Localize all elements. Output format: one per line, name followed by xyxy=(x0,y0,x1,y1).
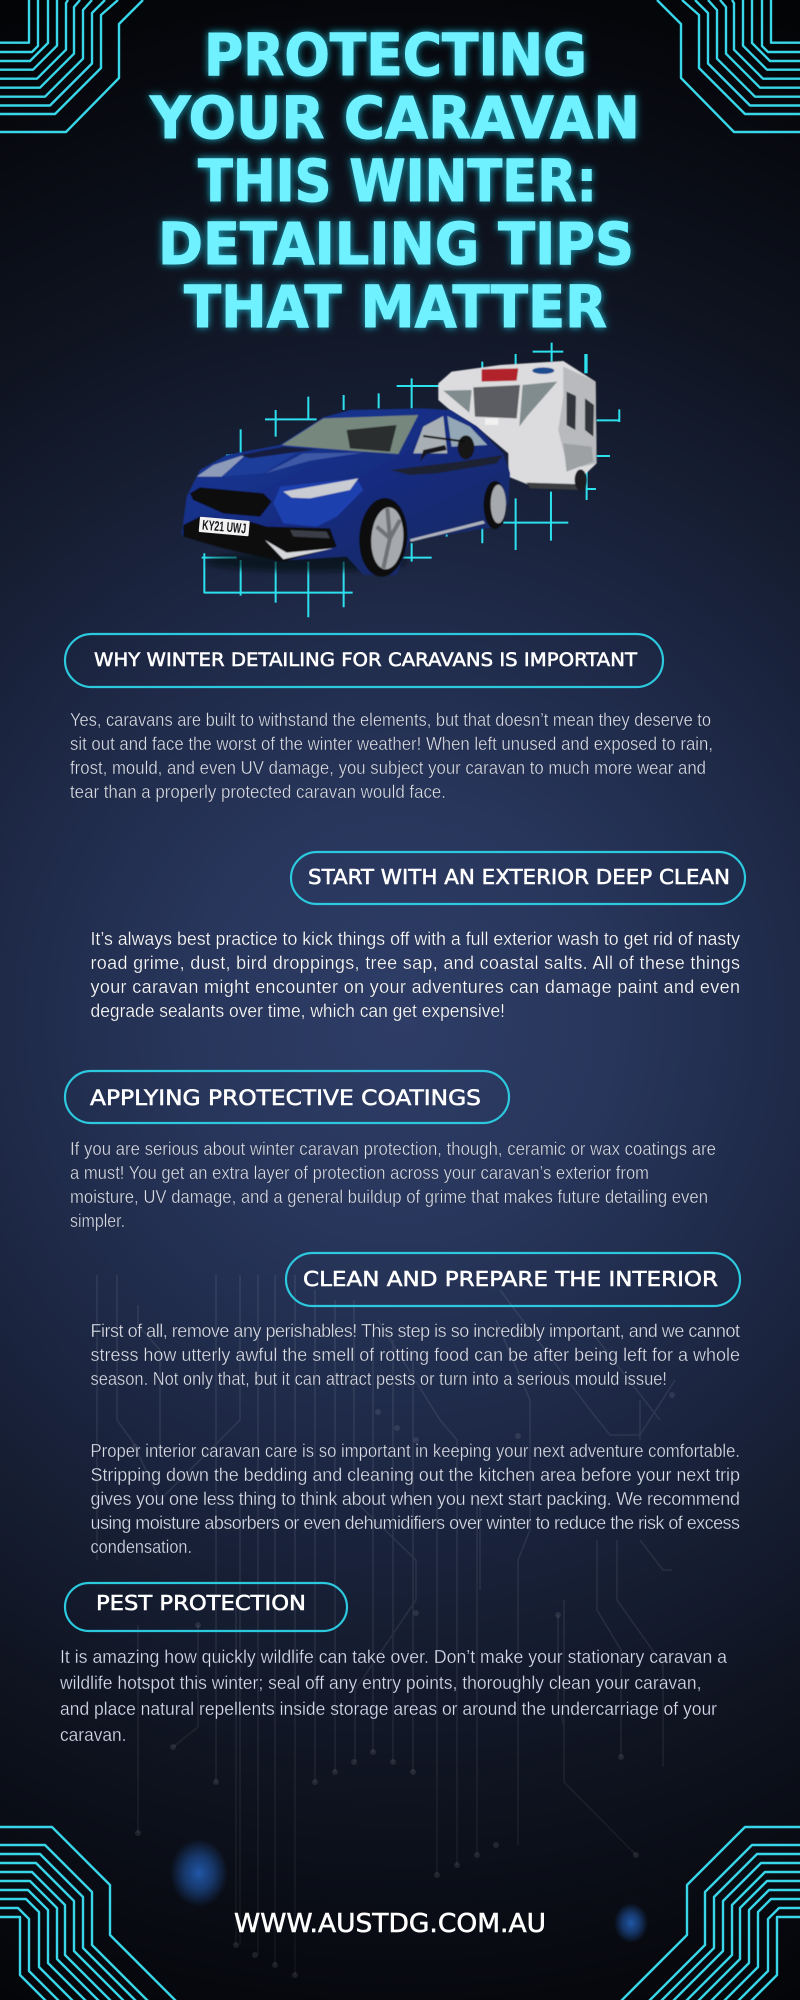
body text: perishables: stress how utterly awful the smell of rotting food can be after being left for a whole xyxy=(90,1345,740,1365)
body text: sit out and face the worst of the winter weather! When left unused and exposed to rain, xyxy=(70,734,713,754)
section 1: why winter detailing xyxy=(65,634,713,802)
title: THIS WINTER: xyxy=(198,147,597,215)
body text: interior care: using moisture absorbers or even dehumidifiers over winter to reduce the risk of excess xyxy=(90,1513,740,1533)
body text: It’s always best practice to kick things off with a full exterior wash to get rid of nasty xyxy=(90,929,740,949)
caravan xyxy=(438,361,597,491)
corner circuit: bottom right xyxy=(621,1827,800,2000)
title: THAT MATTER xyxy=(184,273,607,341)
ground shadow xyxy=(207,552,407,572)
pill heading: PEST PROTECTION xyxy=(96,1591,306,1615)
pill heading xyxy=(65,1071,509,1123)
section 4: clean the interior xyxy=(90,1253,740,1557)
title xyxy=(149,21,640,341)
pill heading: CLEAN AND PREPARE THE INTERIOR xyxy=(303,1267,718,1291)
body text: perishables: season. Not only that, but it can attract pests or turn into a serious mould issue! xyxy=(90,1369,667,1389)
title: DETAILING TIPS xyxy=(158,210,634,278)
body text: interior care xyxy=(90,1441,740,1557)
corner circuit: top left xyxy=(0,0,143,132)
pill heading xyxy=(286,1253,740,1306)
body text: interior care: condensation. xyxy=(90,1537,192,1557)
pill heading: WHY WINTER DETAILING FOR CARAVANS IS IMPORTANT xyxy=(94,650,638,671)
pill heading xyxy=(65,634,663,687)
body text: Yes, caravans are built to withstand the elements, but that doesn’t mean they deserve to xyxy=(70,710,711,730)
body text xyxy=(70,710,713,802)
body text: and place natural repellents inside storage areas or around the undercarriage of your xyxy=(60,1699,717,1719)
body text: wildlife hotspot this winter; seal off any entry points, thoroughly clean your caravan, xyxy=(59,1673,702,1693)
background circuit pattern xyxy=(97,1275,675,1978)
pill heading: APPLYING PROTECTIVE COATINGS xyxy=(90,1086,481,1110)
body text xyxy=(59,1647,728,1745)
title: YOUR CARAVAN xyxy=(149,84,640,152)
number plate: KY21 UWJ xyxy=(202,517,247,536)
body text: your caravan might encounter on your adventures can damage paint and even xyxy=(90,977,740,997)
section 3: protective coatings xyxy=(65,1071,716,1231)
body text: caravan. xyxy=(60,1725,126,1745)
body text: perishables xyxy=(90,1321,740,1389)
body text: interior care: Proper interior caravan care is so important in keeping your next adventure comfortable. xyxy=(90,1441,740,1461)
body text: moisture, UV damage, and a general buildup of grime that makes future detailing even xyxy=(70,1187,708,1207)
footer url: WWW.AUSTDG.COM.AU xyxy=(234,1909,546,1939)
body text: interior care: Stripping down the bedding and cleaning out the kitchen area before your next trip xyxy=(90,1465,740,1485)
glow spot right xyxy=(614,1903,648,1943)
body text: tear than a properly protected caravan would face. xyxy=(70,782,446,802)
section 5: pest protection xyxy=(59,1583,728,1745)
number plate xyxy=(199,516,250,537)
car and caravan illustration xyxy=(182,343,619,617)
pill heading xyxy=(65,1583,347,1631)
body text xyxy=(70,1139,716,1231)
corner circuit: top right xyxy=(657,0,800,132)
pill heading xyxy=(291,852,745,904)
cyan grid behind vehicles xyxy=(202,343,619,617)
title: PROTECTING xyxy=(204,21,587,89)
glow spot left xyxy=(170,1839,228,1907)
corner circuit: bottom left xyxy=(0,1827,176,2000)
body text: frost, mould, and even UV damage, you subject your caravan to much more wear and xyxy=(70,758,706,778)
body text: interior care: gives you one less thing to think about when you next start packing. We recommend xyxy=(90,1489,740,1509)
body text: simpler. xyxy=(70,1211,125,1231)
body text: road grime, dust, bird droppings, tree sap, and coastal salts. All of these things xyxy=(90,953,740,973)
body text: It is amazing how quickly wildlife can take over. Don’t make your stationary caravan a xyxy=(60,1647,728,1667)
body text xyxy=(90,929,740,1021)
body text: degrade sealants over time, which can get expensive! xyxy=(90,1001,505,1021)
section 2: exterior deep clean xyxy=(90,852,745,1021)
car xyxy=(182,408,510,578)
pill heading: START WITH AN EXTERIOR DEEP CLEAN xyxy=(308,865,730,889)
body text: If you are serious about winter caravan protection, though, ceramic or wax coatings are xyxy=(70,1139,716,1159)
body text: a must! You get an extra layer of protection across your caravan’s exterior from xyxy=(70,1163,649,1183)
body text: perishables: First of all, remove any perishables! This step is so incredibly important, and we cannot xyxy=(90,1321,740,1341)
